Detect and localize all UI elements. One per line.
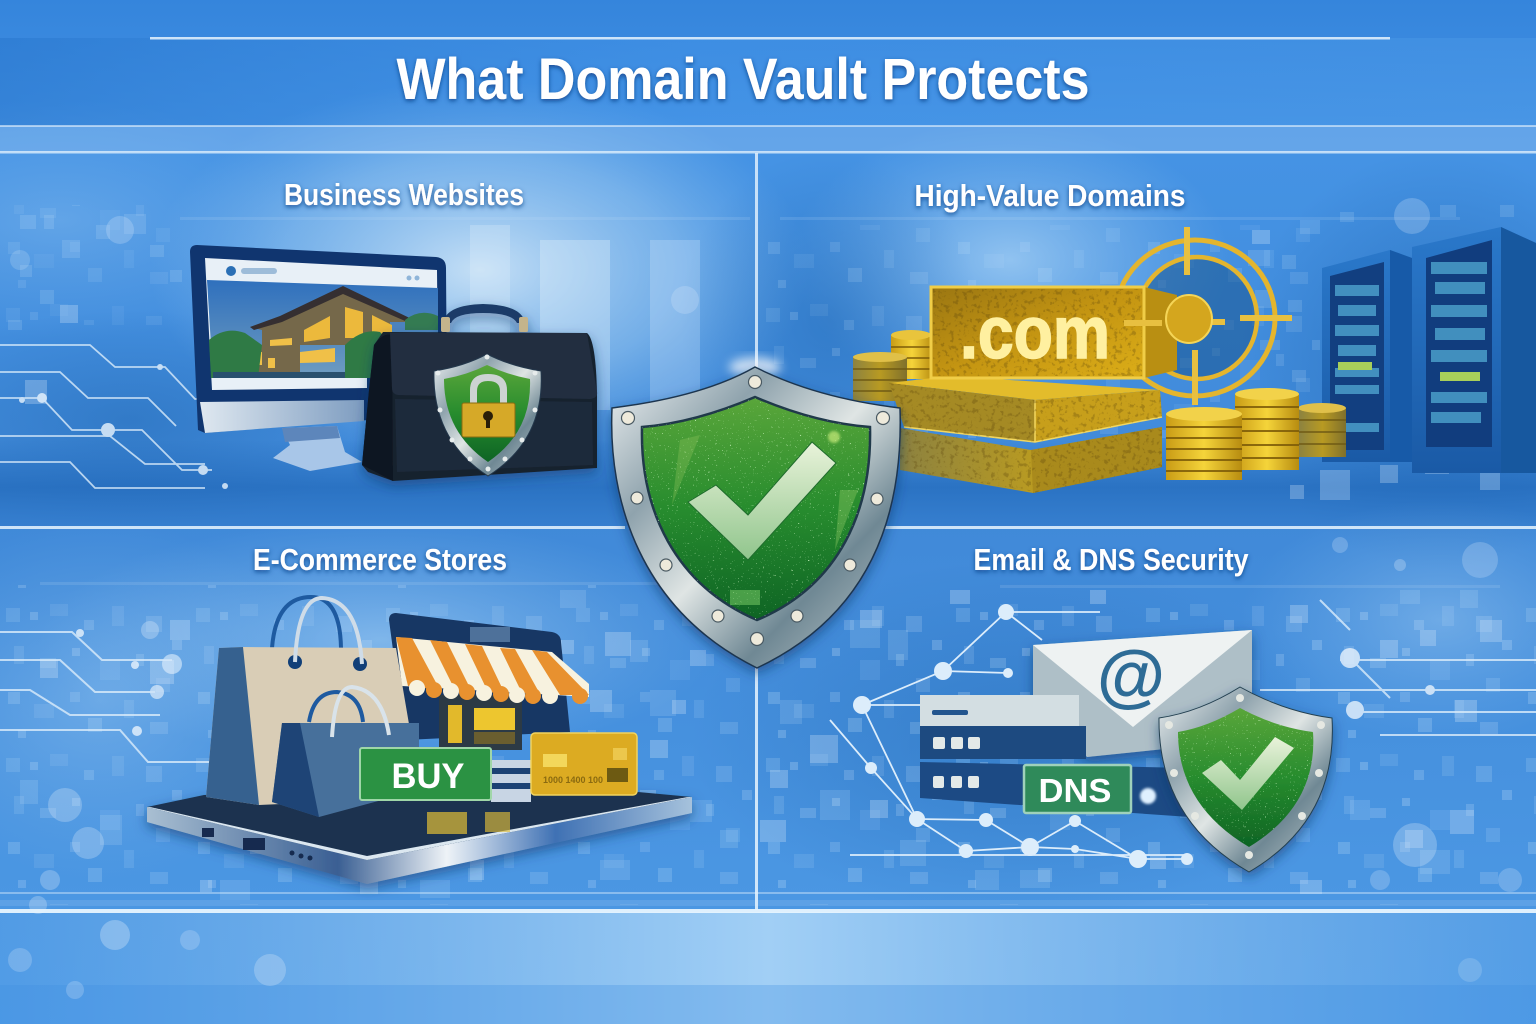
label: .com: .com	[960, 291, 1110, 374]
icon: payment card	[531, 733, 637, 795]
icon: glow	[1140, 788, 1156, 804]
title: What Domain Vault Protects	[396, 47, 1090, 112]
circuit lines left top	[0, 345, 240, 489]
check mark	[688, 442, 836, 560]
icon: shield with check	[1159, 687, 1332, 872]
bokeh circles	[8, 198, 1522, 999]
icon: buy button	[360, 748, 491, 800]
icon: storefront	[389, 613, 589, 802]
panel: business websites illustration	[190, 245, 597, 481]
panel: e-commerce illustration	[147, 597, 692, 884]
icon: dns servers	[920, 695, 1190, 817]
circuit lines right bottom	[1260, 600, 1536, 735]
icon: shopping bags	[206, 597, 419, 817]
heading: business websites: Business Websites	[284, 177, 524, 212]
network graph	[830, 604, 1193, 868]
heading: high-value domains: High-Value Domains	[914, 178, 1186, 213]
symbol: at sign: @	[1097, 636, 1165, 714]
icon: envelope	[1033, 630, 1252, 757]
pixel pattern	[0, 205, 1536, 906]
badge: dns: DNS	[1038, 772, 1112, 809]
icon: tablet base	[147, 787, 692, 884]
icon: desktop monitor	[190, 245, 447, 471]
icon: server racks	[1322, 227, 1536, 473]
central shield	[612, 357, 900, 668]
icon: crosshair	[1124, 227, 1292, 405]
icon: buy button: BUY	[392, 757, 464, 796]
circuit lines left bottom	[0, 629, 218, 762]
icon: briefcase	[362, 304, 597, 481]
icon: gold bars	[889, 287, 1177, 493]
rivets	[622, 376, 890, 646]
icon: small shield with padlock	[434, 354, 541, 476]
icon: left coin stacks	[853, 330, 933, 401]
badge: dns	[1024, 765, 1131, 813]
heading: email and dns security: Email & DNS Security	[974, 542, 1249, 577]
heading: e-commerce stores: E-Commerce Stores	[253, 542, 507, 577]
icon: target rings	[1115, 240, 1275, 396]
panel: email and dns illustration	[830, 604, 1332, 872]
icon: payment card: 1000 1400 100	[543, 775, 603, 785]
icon: right coin stacks	[1166, 388, 1346, 480]
panel: high-value domains illustration	[853, 227, 1536, 493]
